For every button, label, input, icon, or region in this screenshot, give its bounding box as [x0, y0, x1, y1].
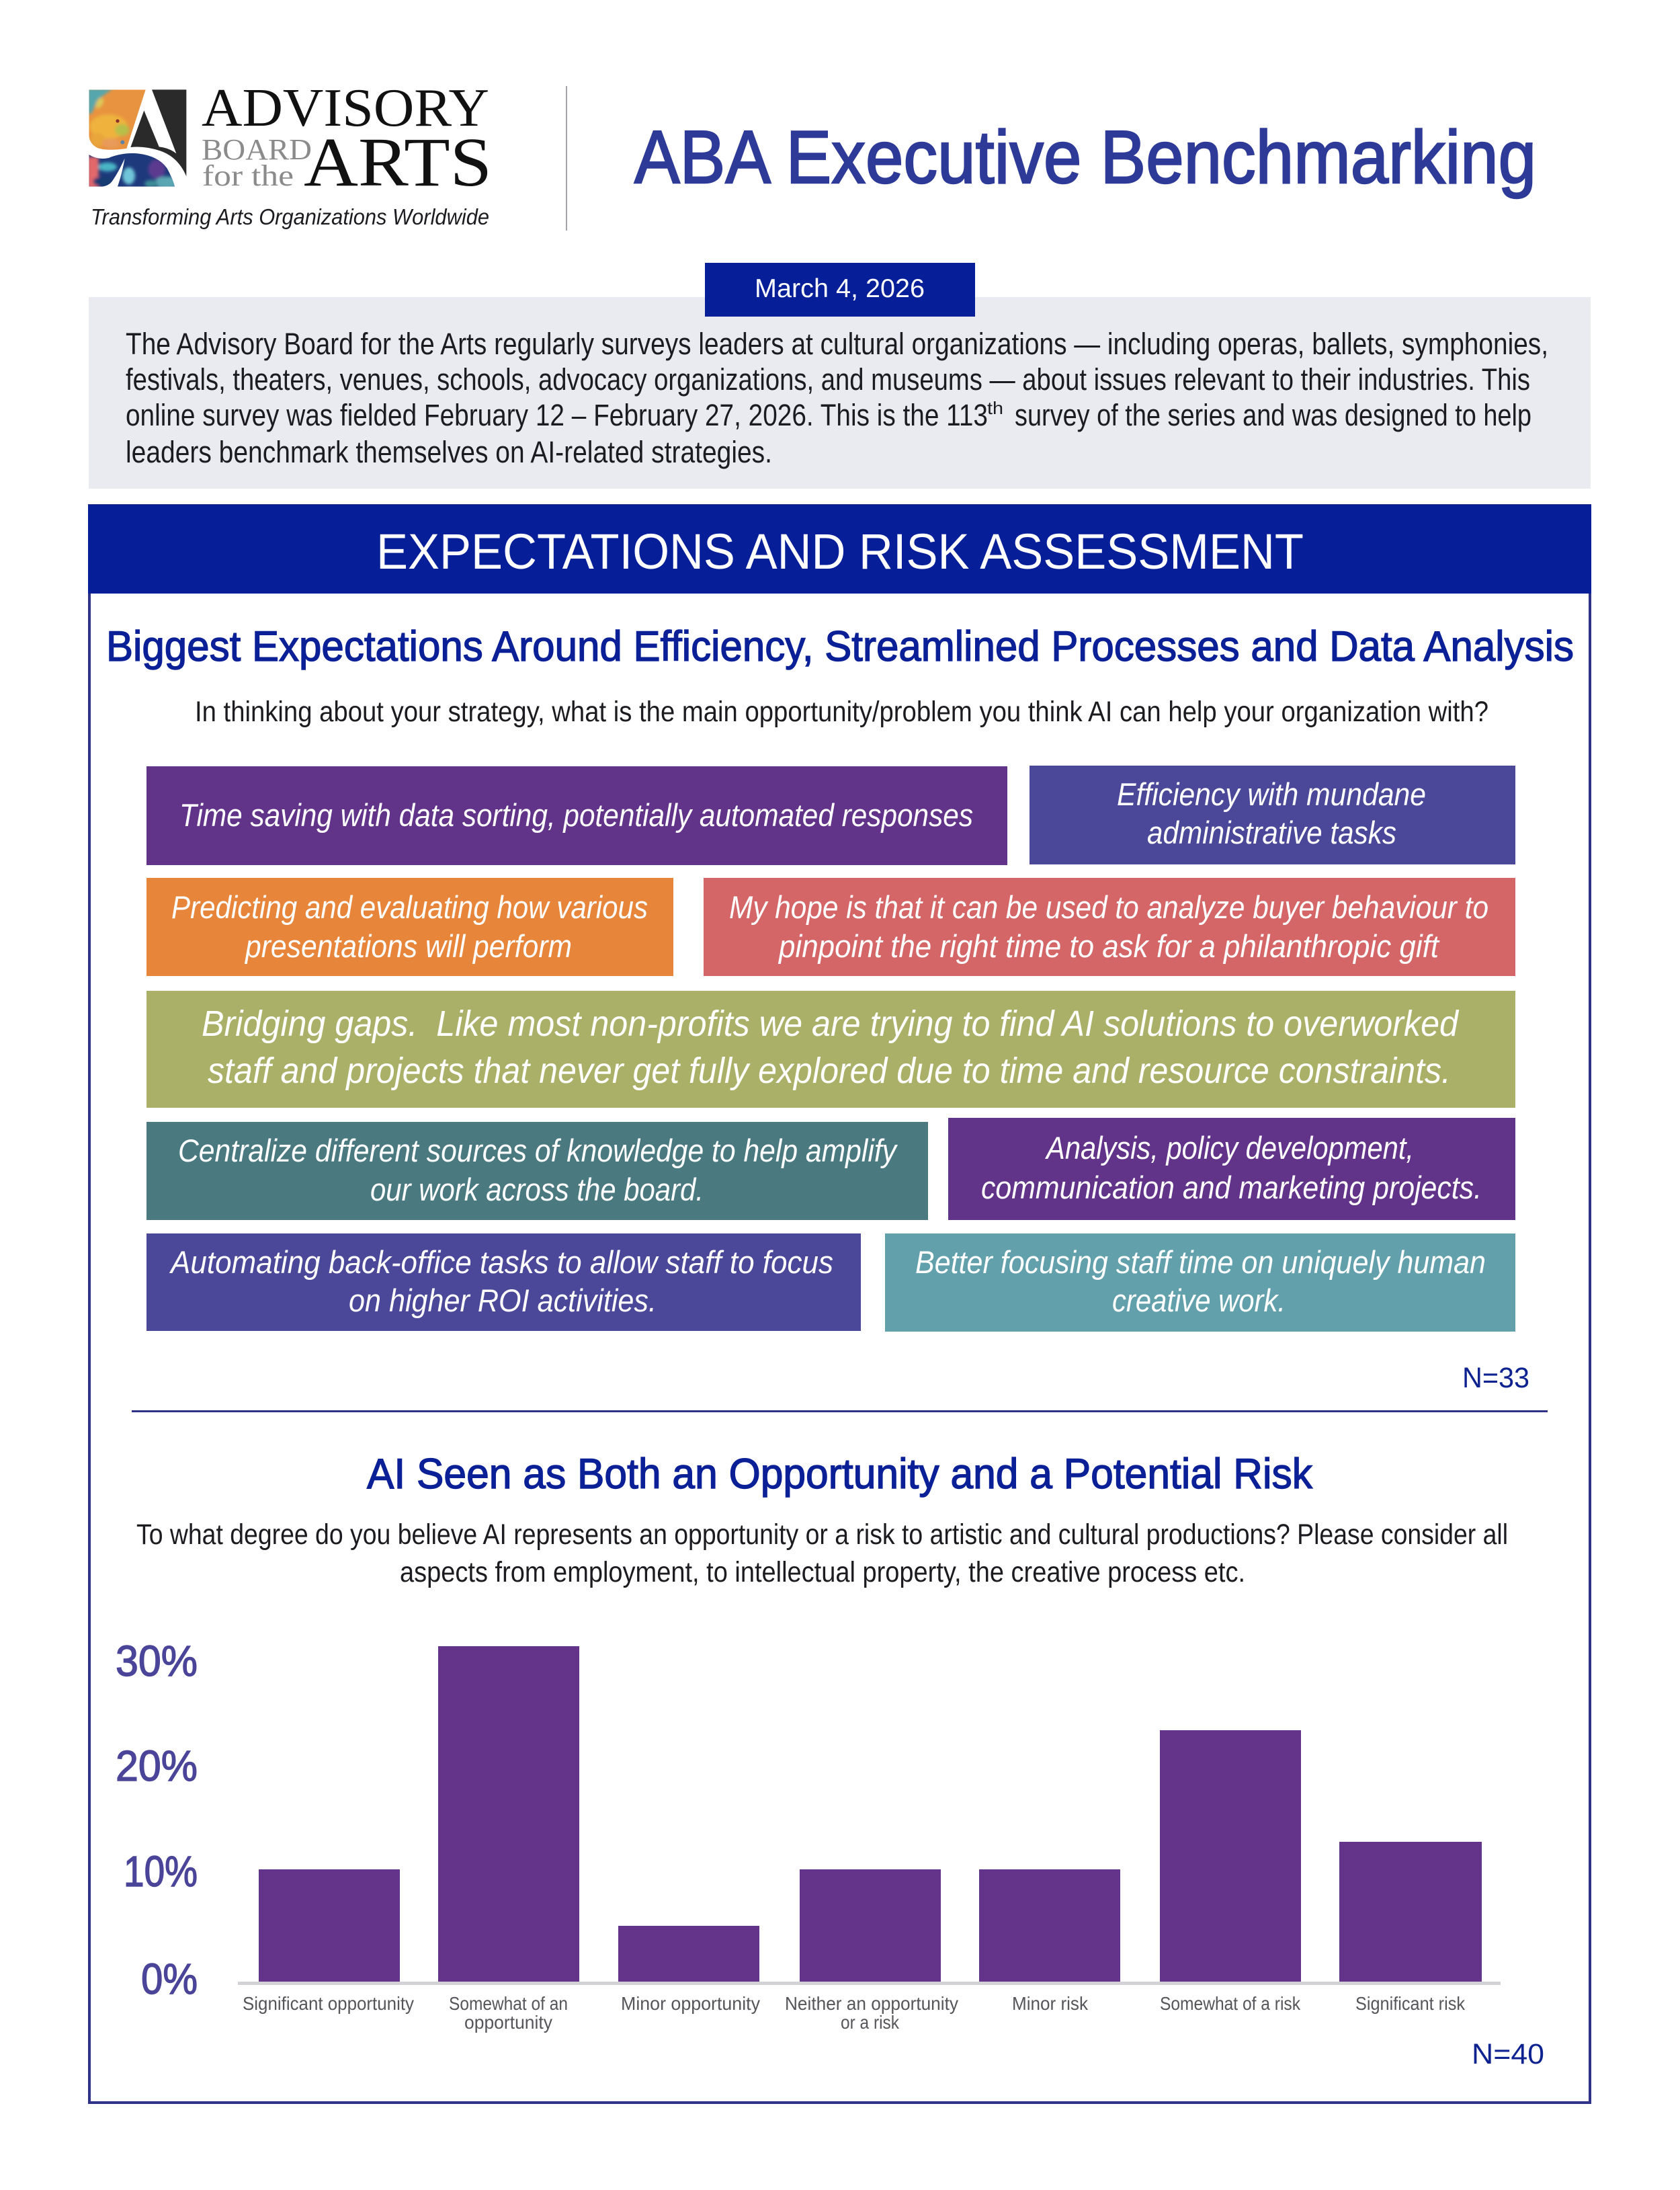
tile: time saving: [146, 766, 1007, 865]
logo wordmark: ARTS: ARTS: [304, 124, 492, 201]
x axis labels: opportunity: [464, 2012, 552, 2033]
y axis labels: 30%: [116, 1637, 198, 1685]
x axis labels: Minor risk: [1012, 1993, 1089, 2014]
question 1: In thinking about your strategy, what is the main opportunity/problem you think AI can help your organization with?: [195, 696, 1488, 728]
tile: time saving: Time saving with data sorting, potentially automated responses: [179, 797, 973, 833]
tile: buyer behaviour: pinpoint the right time to ask for a philanthropic gift: [778, 928, 1440, 964]
x axis labels: Somewhat of an: [449, 1993, 568, 2014]
question 2: [136, 1518, 1508, 1588]
intro text: online survey was fielded February 12 – February 27, 2026. This is the 113: [126, 398, 988, 432]
tile: efficiency: administrative tasks: [1147, 815, 1396, 850]
x axis labels: or a risk: [841, 2012, 900, 2033]
x axis labels: Significant opportunity: [243, 1993, 414, 2014]
question 2: aspects from employment, to intellectual property, the creative process etc.: [400, 1556, 1245, 1588]
y axis labels: [116, 1637, 198, 2003]
logo mark: [87, 89, 186, 189]
y axis labels: 10%: [124, 1847, 198, 1896]
tile: centralize: our work across the board.: [370, 1172, 704, 1207]
logo tagline: Transforming Arts Organizations Worldwide: [91, 204, 489, 229]
tile: efficiency: [1030, 766, 1515, 864]
tile: predicting: Predicting and evaluating how various: [171, 889, 648, 925]
tile: back-office: [146, 1233, 861, 1331]
tile: creative work: [885, 1233, 1515, 1332]
heading: biggest expectations: Biggest Expectations Around Efficiency, Streamlined Processes and Data Analysis: [106, 623, 1574, 670]
sample size N=33: N=33: [1462, 1362, 1529, 1394]
tile: creative work: creative work.: [1112, 1283, 1286, 1318]
tile: centralize: [146, 1122, 928, 1220]
bars: [259, 1646, 1482, 1982]
date badge: March 4, 2026: [755, 274, 925, 303]
intro text: [126, 327, 1548, 469]
y axis labels: 0%: [141, 1955, 198, 2003]
question 2: To what degree do you believe AI represents an opportunity or a risk to artistic and cultural productions? Please consider all: [136, 1518, 1508, 1551]
logo wordmark: BOARD: BOARD: [202, 133, 312, 166]
intro text: survey of the series and was designed to help: [1015, 398, 1531, 432]
tile: back-office: Automating back-office tasks to allow staff to focus: [169, 1244, 833, 1280]
tile: bridging gaps: staff and projects that never get fully explored due to time and resource constraints.: [208, 1051, 1451, 1091]
x axis labels: [243, 1993, 1466, 2033]
tile: analysis: [948, 1118, 1515, 1220]
tile: analysis: Analysis, policy development,: [1044, 1130, 1414, 1166]
section frame: [89, 505, 1590, 2103]
tile: bridging gaps: [146, 991, 1515, 1108]
bar chart: [116, 1637, 1501, 2033]
logo wordmark: for the: for the: [202, 159, 294, 192]
x axis line: [238, 1982, 1501, 1985]
intro text: th: [987, 398, 1003, 418]
tile: centralize: Centralize different sources of knowledge to help amplify: [178, 1133, 898, 1168]
tile: bridging gaps: Bridging gaps. Like most non-profits we are trying to find AI solutions to overworked: [202, 1004, 1460, 1044]
intro panel: [89, 297, 1591, 489]
tile: buyer behaviour: [704, 878, 1515, 976]
y axis labels: 20%: [116, 1742, 198, 1790]
tile: creative work: Better focusing staff time on uniquely human: [915, 1244, 1486, 1280]
heading: opportunity and risk: AI Seen as Both an Opportunity and a Potential Risk: [367, 1451, 1312, 1498]
date badge: [705, 263, 975, 317]
x axis labels: Minor opportunity: [621, 1993, 760, 2014]
x axis labels: Neither an opportunity: [785, 1993, 958, 2014]
x axis labels: Significant risk: [1355, 1993, 1466, 2014]
section banner: EXPECTATIONS AND RISK ASSESSMENT: [376, 524, 1304, 579]
sample size N=40: N=40: [1472, 2038, 1544, 2070]
main title: ABA Executive Benchmarking: [634, 116, 1536, 199]
section banner: [88, 505, 1591, 594]
tile: efficiency: Efficiency with mundane: [1117, 776, 1426, 812]
tile: predicting: [146, 878, 673, 976]
tile: predicting: presentations will perform: [244, 928, 572, 964]
x axis labels: Somewhat of a risk: [1160, 1993, 1301, 2014]
logo wordmark: ADVISORY: ADVISORY: [202, 79, 489, 138]
tile: buyer behaviour: My hope is that it can be used to analyze buyer behaviour to: [729, 889, 1488, 925]
response tiles: [146, 766, 1515, 1332]
tile: back-office: on higher ROI activities.: [349, 1283, 657, 1318]
intro text: leaders benchmark themselves on AI-related strategies.: [126, 435, 772, 469]
logo: [87, 79, 492, 229]
tile: analysis: communication and marketing projects.: [981, 1170, 1482, 1205]
